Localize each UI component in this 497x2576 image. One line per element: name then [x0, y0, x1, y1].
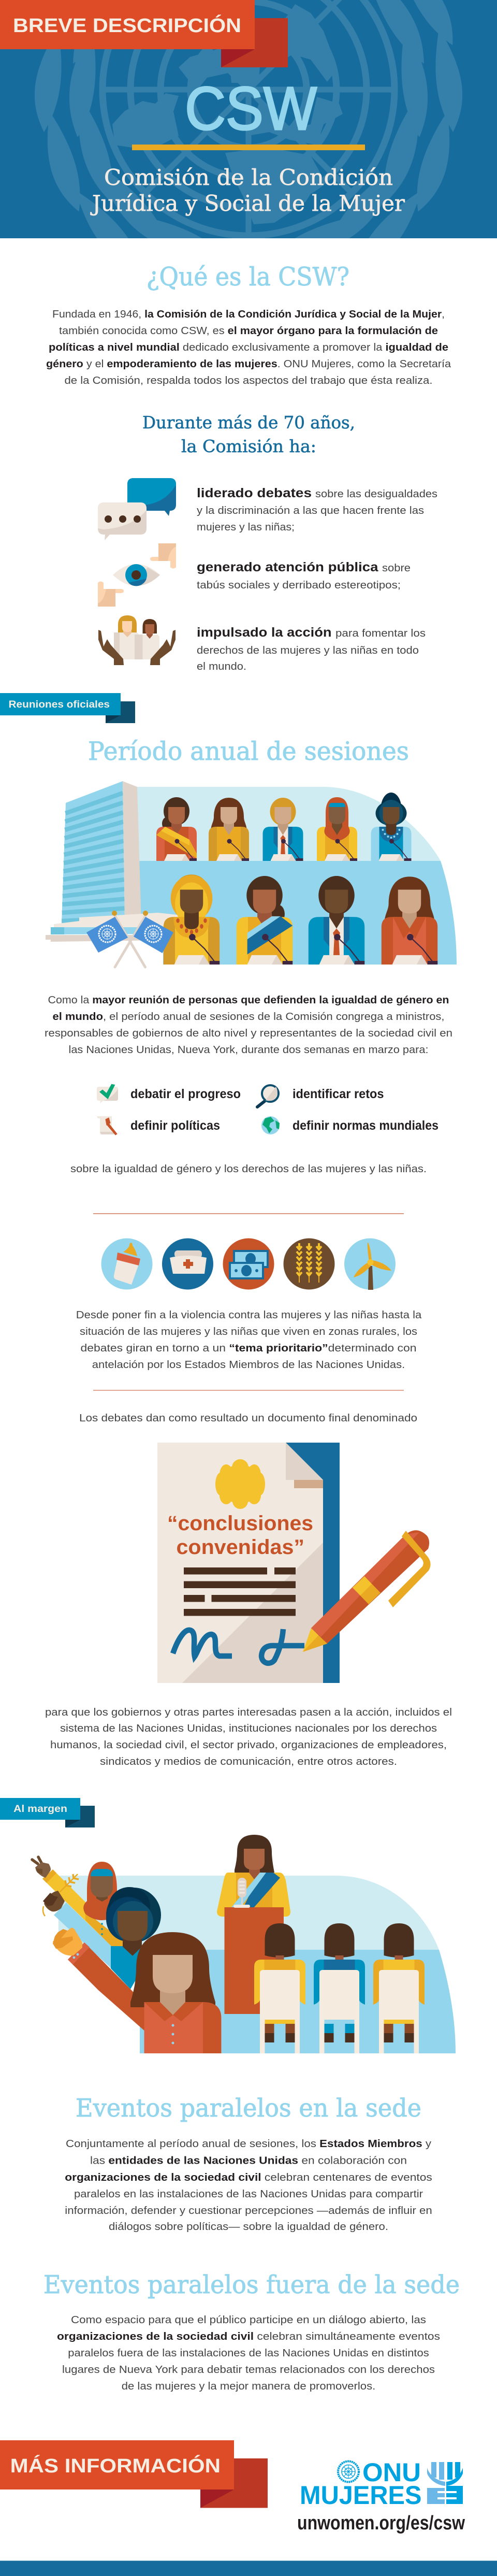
text: mayor reunión — [45, 995, 452, 1056]
intro text block: políticas a nivel mundial dedicado exclusivamente a promover la igualdad de — [49, 342, 448, 353]
text: eventos fuera de la sede: Como espacio para que el público participe en un diálogo abierto, las — [71, 2314, 426, 2326]
activist with hijab — [42, 1862, 123, 1946]
document title: “conclusiones — [167, 1512, 313, 1535]
document title: convenidas” — [176, 1536, 304, 1559]
UN emblem watermark — [35, 0, 462, 238]
text: debatir el progreso: debatir el progreso — [130, 1087, 241, 1101]
icon: banknotes — [223, 1238, 274, 1290]
text: liderado debates: y la discriminación a las que hacen frente las — [197, 505, 424, 516]
ribbon: más información: MÁS INFORMACIÓN — [10, 2454, 221, 2477]
top row delegate 1 — [156, 797, 197, 861]
wheat stalk — [43, 1874, 79, 1916]
text: eventos en la sede: organizaciones de la sociedad civil celebran centenares de eventos — [65, 2172, 432, 2183]
heading: eventos paralelos fuera de la sede: Eventos paralelos fuera de la sede — [43, 2270, 460, 2299]
text: para que los gobiernos: sindicatos y medios de comunicación, entre otros actores. — [100, 1756, 397, 1767]
logo wordmark: MUJERES — [300, 2481, 421, 2510]
icon: women in hands — [98, 615, 176, 665]
subtitle — [90, 165, 405, 216]
website url: unwomen.org/es/csw — [297, 2512, 465, 2534]
text: definir normas mundiales: definir normas mundiales — [293, 1118, 438, 1133]
text: para que los gobiernos: para que los gobiernos y otras partes interesadas pasen a la acción, incluidos el — [45, 1707, 452, 1718]
logo wordmark — [300, 2458, 421, 2510]
crossed UN flags — [86, 911, 173, 967]
ribbon: breve descripción — [0, 0, 288, 67]
text: eventos en la sede: información, defender y cuestionar percepciones —además de influir en — [65, 2205, 432, 2217]
text: sobre la igualdad: sobre la igualdad de género y los derechos de las mujeres y las niñas. — [70, 1163, 427, 1175]
text: para que los gobiernos: sistema de las Naciones Unidas, instituciones nacionales por los derechos — [60, 1723, 437, 1734]
text: impulsado la acción: derechos de las mujeres y las niñas en todo — [197, 645, 419, 656]
intro text block — [46, 309, 451, 386]
bottom row delegate 4 — [382, 876, 437, 965]
pen — [303, 1530, 431, 1652]
ribbon: breve descripción: BREVE DESCRIPCIÓN — [13, 14, 241, 37]
UN emblem — [338, 2462, 359, 2482]
text: identificar retos: identificar retos — [293, 1087, 384, 1101]
text: eventos fuera de la sede: de las mujeres y la mejor manera de promoverlos. — [122, 2381, 375, 2392]
text: eventos fuera de la sede: paralelos fuera de las instalaciones de las Naciones Unidas en distintos — [68, 2348, 429, 2359]
document title — [167, 1512, 313, 1559]
text: documento final: Los debates dan como resultado un documento final denominado — [79, 1413, 417, 1424]
text: tema prioritario: antelación por los Estados Miembros de las Naciones Unidas. — [92, 1359, 405, 1371]
signature — [173, 1629, 304, 1663]
icon: check bubble — [97, 1085, 118, 1103]
hand: raised orange fist — [53, 1928, 82, 1955]
icon: eye and framing hands — [98, 543, 176, 607]
intro text block: Fundada en 1946, la Comisión de la Condición Jurídica y Social de la Mujer , — [52, 309, 445, 320]
text: generado atención pública: tabús sociales y derribado estereotipos; — [197, 580, 401, 591]
text: liderado debates — [197, 486, 437, 533]
text: generado atención pública — [197, 560, 411, 591]
text: generado atención pública: generado atención pública — [197, 560, 379, 574]
text: mayor reunión: el mundo , el período anual de sesiones de la Comisión congrega a ministros, — [53, 1011, 444, 1023]
text: para que los gobiernos: humanos, la sociedad civil, el sector privado, organizaciones de empleadores, — [50, 1739, 447, 1751]
hand: raised dark fist — [43, 1891, 65, 1911]
text: impulsado la acción: el mundo. — [197, 661, 246, 672]
text: tema prioritario: situación de las mujeres y las niñas que viven en zonas rurales, los — [80, 1326, 417, 1337]
icon: speech bubbles — [98, 478, 176, 540]
top row delegate 5 — [371, 793, 411, 861]
seated audience member 1 — [254, 1923, 305, 2053]
icon: wind turbine — [344, 1238, 396, 1290]
ribbon: reuniones oficiales — [0, 693, 135, 723]
text: eventos en la sede: Conjuntamente al período anual de sesiones, los Estados Miembros y — [66, 2138, 431, 2150]
seal — [215, 1459, 265, 1509]
icon: baby bottle — [101, 1238, 152, 1290]
icon: wheat — [284, 1238, 334, 1290]
text: eventos en la sede — [65, 2138, 432, 2233]
bottom row delegate 2 — [237, 876, 293, 965]
text: mayor reunión: Como la mayor reunión de personas que defienden la igualdad de género en — [48, 995, 449, 1006]
hand: peace sign — [32, 1857, 51, 1878]
footer bar — [0, 2561, 497, 2576]
ribbon: al margen: Al margen — [13, 1804, 67, 1815]
heading: qué es la CSW: ¿Qué es la CSW? — [147, 262, 349, 292]
illustration: agreed conclusions document — [157, 1443, 431, 1683]
activist with blue turban — [54, 1887, 161, 1989]
icon: gavel scroll — [97, 1116, 117, 1135]
bottom row delegate 3 — [309, 876, 364, 965]
text: definir políticas: definir políticas — [130, 1118, 220, 1133]
activist in front with long brown hair — [68, 1932, 221, 2053]
text: tema prioritario: Desde poner fin a la violencia contra las mujeres y las niñas hasta la — [76, 1309, 422, 1321]
subtitle: Jurídica y Social de la Mujer — [90, 191, 405, 216]
top row delegate 4 — [317, 797, 357, 861]
ribbon: al margen — [0, 1798, 95, 1827]
subheading: durante más de 70 años: la Comisión ha: — [181, 436, 316, 456]
title underline — [132, 145, 365, 150]
text: liderado debates: liderado debates — [197, 486, 312, 500]
gender symbol — [427, 2462, 463, 2504]
logo wordmark: ONU — [362, 2458, 421, 2487]
icon: nurse cap — [162, 1238, 213, 1290]
text: impulsado la acción — [197, 625, 426, 672]
subheading: durante más de 70 años: Durante más de 70 años, — [142, 412, 355, 433]
text: generado atención pública: sobre — [382, 563, 411, 574]
intro text block: también conocida como CSW, es el mayor órgano para la formulación de — [59, 325, 438, 337]
heading: eventos paralelos en la sede: Eventos paralelos en la sede — [76, 2094, 421, 2123]
text: liderado debates: mujeres y las niñas; — [197, 522, 295, 533]
text: impulsado la acción: impulsado la acción — [197, 625, 331, 640]
text: mayor reunión: las Naciones Unidas, Nueva York, durante dos semanas en marzo para: — [68, 1044, 429, 1056]
top row delegate 2 — [209, 798, 249, 861]
text: eventos fuera de la sede — [57, 2314, 440, 2392]
header panel — [0, 0, 497, 238]
title CSW: CSW — [185, 75, 317, 143]
ribbon: reuniones oficiales: Reuniones oficiales — [8, 699, 110, 710]
logo: ONU Mujeres — [300, 2458, 463, 2510]
text: tema prioritario — [76, 1309, 422, 1371]
heading: período anual de sesiones: Período anual de sesiones — [88, 737, 409, 766]
document text lines — [184, 1567, 296, 1616]
text: eventos fuera de la sede: lugares de Nueva York para debatir temas relacionados con los derechos — [62, 2364, 435, 2376]
bottom row delegate 1 — [164, 874, 220, 965]
text: eventos en la sede: las entidades de las Naciones Unidas en colaboración con — [90, 2155, 407, 2166]
speaker at podium — [217, 1835, 290, 2014]
text: mayor reunión: responsables de gobiernos de alto nivel y representantes de la sociedad civil en — [45, 1028, 452, 1039]
text: eventos en la sede: diálogos sobre políticas— sobre la igualdad de género. — [109, 2221, 388, 2233]
subtitle: Comisión de la Condición — [104, 165, 393, 190]
text: eventos fuera de la sede: organizaciones de la sociedad civil celebran simultáneamente eventos — [57, 2331, 440, 2342]
text: liderado debates: sobre las desigualdades — [315, 488, 437, 500]
illustration: annual session panel — [46, 781, 457, 967]
icon: magnifying glass — [257, 1085, 279, 1107]
intro text block: de la Comisión, respalda todos los aspectos del trabajo que ésta realiza. — [64, 375, 433, 386]
seated audience member 2 — [314, 1923, 365, 2053]
ribbon: más información — [0, 2440, 268, 2508]
UN building — [46, 781, 186, 942]
subheading: durante más de 70 años — [142, 412, 355, 456]
text: impulsado la acción: para fomentar los — [335, 628, 426, 639]
top row delegate 3 — [263, 798, 303, 861]
text: tema prioritario: debates giran en torno a un “tema prioritario” determinado con — [81, 1343, 416, 1354]
text: eventos en la sede: paralelos en las instalaciones de las Naciones Unidas para compartir — [74, 2189, 423, 2200]
illustration: side event with speaker and crowd — [32, 1835, 456, 2053]
seated audience member 3 — [373, 1923, 425, 2053]
text: para que los gobiernos — [45, 1707, 452, 1767]
intro text block: género y el empoderamiento de las mujeres . ONU Mujeres, como la Secretaría — [46, 358, 451, 370]
icon: globe — [261, 1116, 280, 1134]
